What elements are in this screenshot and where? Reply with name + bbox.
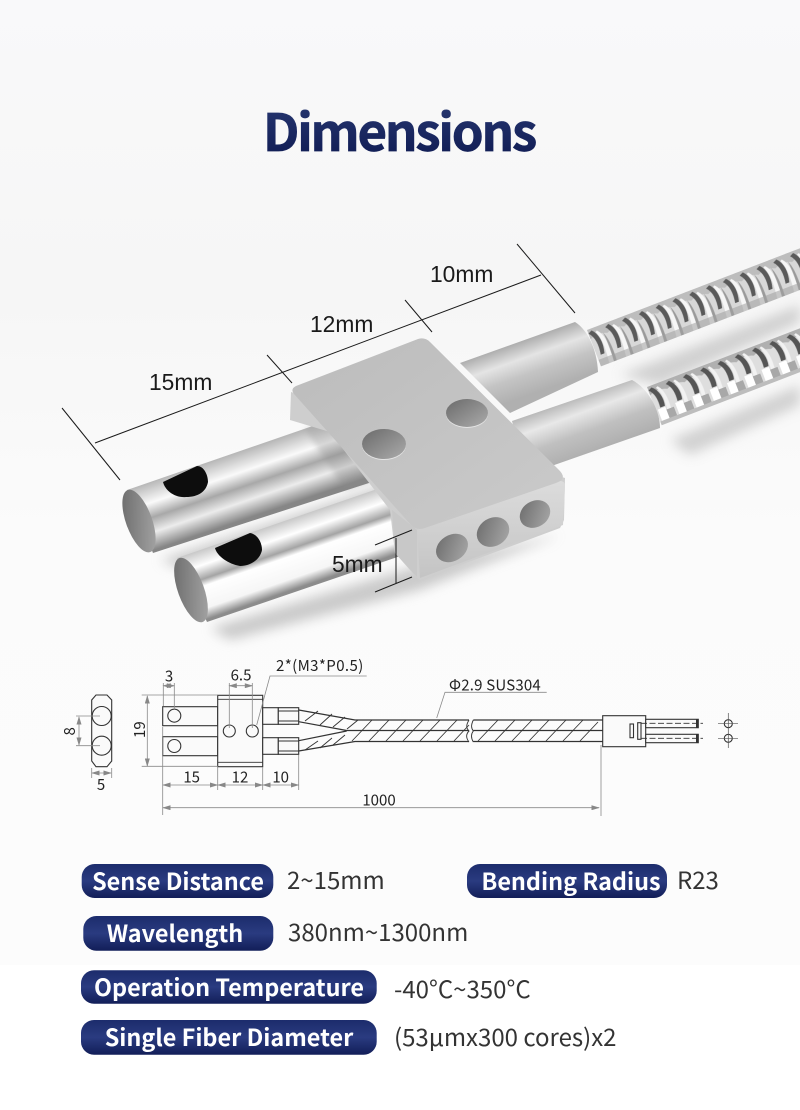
- spec: bending radius: [467, 861, 719, 898]
- spec: sense distance: Sense Distance: [92, 863, 264, 897]
- upper probe tube: [115, 420, 372, 556]
- upper probe window: [163, 466, 208, 497]
- dimension lines and values: 19: [129, 721, 150, 738]
- dimension lines and values: 6.5: [231, 665, 251, 686]
- label 12mm: 12mm: [310, 311, 373, 337]
- thread callout: [257, 655, 367, 725]
- dimension lines and values: 12: [232, 767, 248, 788]
- dimension lines and values: 10: [272, 767, 289, 788]
- label 5mm: 5mm: [332, 551, 383, 577]
- spec: sense distance: 2~15mm: [287, 861, 385, 896]
- dimension lines and values: 1000: [362, 790, 396, 811]
- fiber end crosshairs: [718, 713, 738, 748]
- product photo: fiber optic sensor: [115, 246, 800, 640]
- lower probe tube: [167, 487, 412, 626]
- spec: operation temperature: Operation Temperature: [94, 969, 364, 1003]
- spec: wavelength: [83, 913, 468, 951]
- dimension callouts on photo: [62, 244, 575, 592]
- spec: single fiber diameter: [81, 1018, 617, 1055]
- lower probe window: [215, 533, 262, 566]
- probe tubes: [163, 707, 218, 756]
- dimension lines and values: [129, 665, 601, 816]
- end connector: [603, 716, 646, 747]
- fibers: [641, 719, 703, 743]
- lower armored hose: [647, 326, 800, 425]
- cable material callout: [437, 674, 547, 718]
- end view: 8: [59, 727, 80, 736]
- mounting block: [290, 338, 565, 580]
- spec: wavelength: Wavelength: [107, 915, 243, 949]
- end view: [59, 695, 112, 795]
- spec: sense distance: [82, 861, 385, 898]
- block: [218, 695, 263, 767]
- spec: single fiber diameter: (53µmx300 cores)x2: [394, 1018, 617, 1053]
- ferrules: [263, 708, 299, 754]
- label 15mm: 15mm: [149, 369, 212, 395]
- dimension lines and values: 15: [183, 767, 200, 788]
- end view: 5: [97, 774, 105, 795]
- armored cable: [299, 710, 603, 751]
- spec: operation temperature: [81, 969, 531, 1005]
- technical drawing: [59, 655, 738, 816]
- spec: single fiber diameter: Single Fiber Diameter: [105, 1019, 354, 1053]
- lower metal sleeve: [512, 380, 660, 470]
- title: Dimensions: [263, 92, 536, 166]
- top mounting holes: [362, 399, 488, 460]
- label 10mm: 10mm: [430, 261, 493, 287]
- upper metal sleeve: [460, 322, 598, 413]
- dimension lines and values: 3: [165, 666, 173, 687]
- spec: bending radius: R23: [677, 861, 719, 896]
- spec: bending radius: Bending Radius: [481, 863, 661, 897]
- spec: wavelength: 380nm~1300nm: [288, 913, 468, 948]
- thread callout: 2*(M3*P0.5): [276, 655, 364, 676]
- cable material callout: Φ2.9 SUS304: [449, 674, 541, 696]
- cast shadows: [160, 305, 800, 640]
- spec: operation temperature: -40°C~350°C: [394, 970, 531, 1005]
- upper armored hose: [587, 246, 800, 366]
- front holes: [431, 494, 555, 568]
